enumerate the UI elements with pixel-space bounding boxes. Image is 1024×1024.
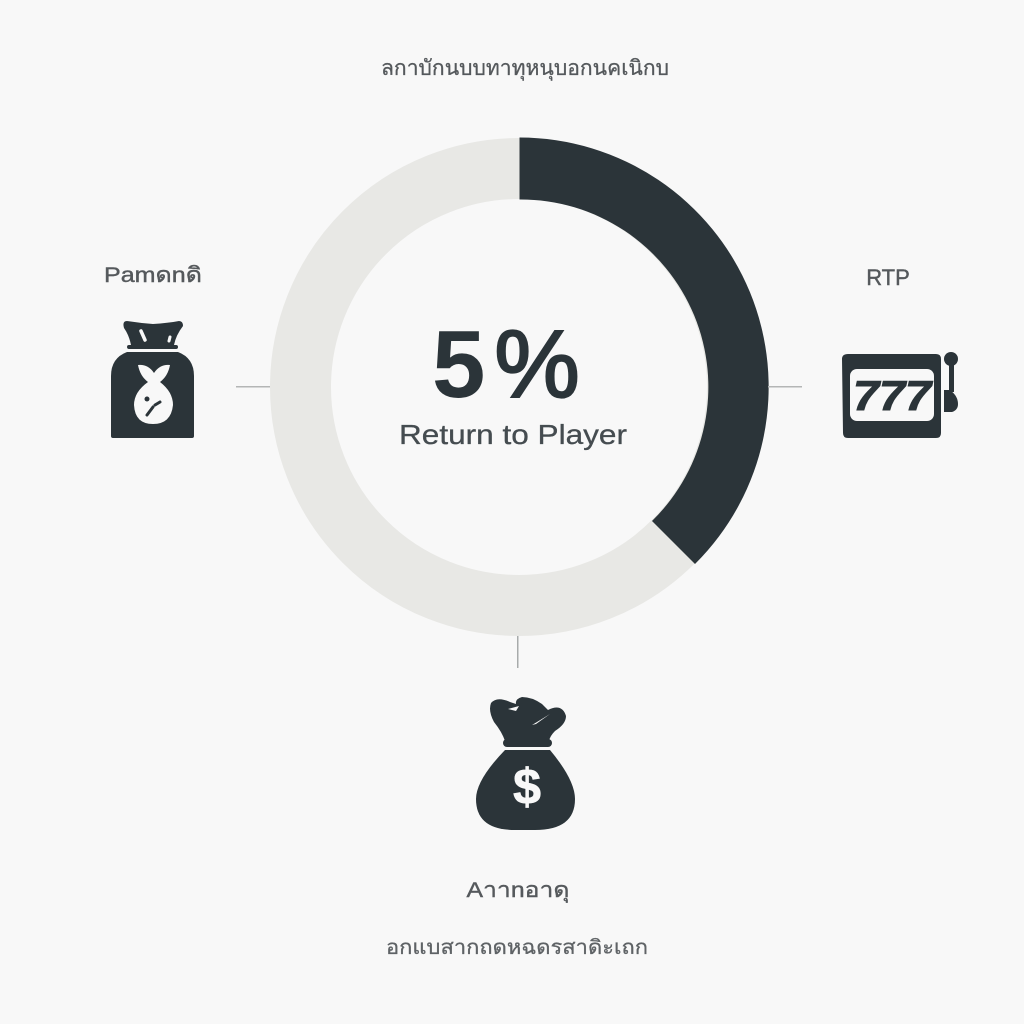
reel digits: 777 [853,372,933,419]
bottom label: Aาาnอาดุ [466,879,570,903]
right label: RTP [866,265,910,290]
title: ลกาบักนบบทาทุหนุบอกนคเนิกบ [381,57,669,81]
bottom description: อกแบสากถดหฉดรสาดิะเถก [386,937,648,959]
icon: money bag [476,697,575,830]
icon: sack with fish [111,321,194,438]
center value: 5% [432,311,580,418]
connector: right [768,386,802,388]
left label: Pamดnดิ [104,264,202,287]
icon: slot machine [842,352,958,438]
connector: bottom [517,636,518,668]
donut chart: 5% return to player [300,138,769,606]
dollar sign: $ [513,759,541,815]
connector: left [236,386,270,388]
center caption: Return to Player [399,419,627,450]
